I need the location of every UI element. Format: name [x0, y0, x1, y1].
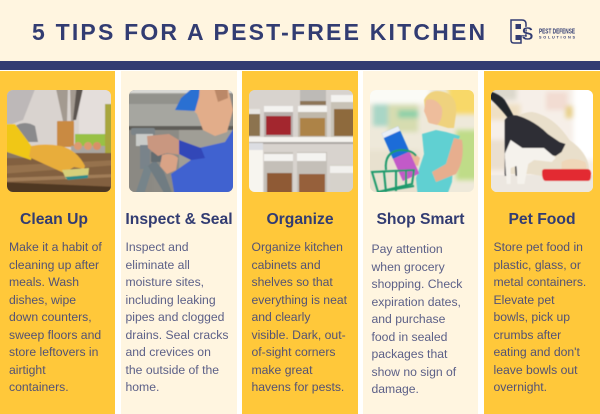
text: Organize tip: and clearly — [252, 310, 310, 324]
heading: Organize: Organize — [266, 211, 334, 228]
text: Inspect & Seal tip — [126, 240, 228, 394]
text: Pet Food tip: eating and don't — [494, 345, 580, 359]
text: Shop Smart tip: expiration dates, — [372, 294, 461, 308]
text: Shop Smart tip: packages that — [372, 347, 447, 361]
text: Organize tip: cabinets and — [252, 258, 321, 272]
text: Clean Up tip: store leftovers in — [9, 345, 98, 359]
heading: Pet Food: Pet Food — [508, 211, 576, 228]
text: Pet Food tip: metal containers. — [494, 275, 586, 289]
text: Pet Food tip: plastic, glass, or — [494, 258, 581, 272]
text: Organize tip: Organize kitchen — [252, 240, 343, 254]
text: Inspect & Seal tip: and crevices on — [126, 345, 211, 359]
text: Pet Food tip: bowls, pick up — [494, 310, 570, 324]
title: 5 TIPS FOR A PEST-FREE KITCHEN — [32, 19, 487, 45]
heading: Clean Up: Clean Up — [20, 211, 88, 228]
text: Pet Food tip: leave bowls out — [494, 362, 578, 376]
text: Inspect & Seal tip: including leaking — [126, 292, 216, 306]
text: Organize tip: shelves so that — [252, 275, 333, 289]
text: Organize tip — [252, 240, 347, 394]
panel: Pet Food — [484, 71, 600, 414]
logo: Pest Defense Solutions: S — [522, 24, 534, 44]
text: Pet Food tip: crumbs after — [494, 328, 561, 342]
logo: Pest Defense Solutions — [510, 19, 575, 44]
text: Clean Up tip: meals. Wash — [9, 275, 79, 289]
heading: Shop Smart: Shop Smart — [376, 211, 465, 228]
text: Shop Smart tip: damage. — [372, 382, 419, 396]
text: Inspect & Seal tip: pipes and clogged — [126, 310, 224, 324]
text: Organize tip: everything is neat — [252, 292, 347, 306]
heading: Inspect & Seal: Inspect & Seal — [125, 211, 233, 228]
panel: Organize — [242, 71, 358, 414]
photo: plumber fixing sink pipes — [129, 90, 233, 192]
text: Shop Smart tip: shopping. Check — [372, 277, 462, 291]
text: Clean Up tip: dishes, wipe — [9, 292, 76, 306]
text: Pet Food tip: Store pet food in — [494, 240, 583, 254]
text: Clean Up tip: sweep floors and — [9, 328, 101, 342]
text: Organize tip: visible. Dark, out- — [252, 328, 346, 342]
navy divider bar — [0, 61, 600, 70]
text: Clean Up tip: containers. — [9, 380, 69, 394]
text: Shop Smart tip: when grocery — [372, 260, 445, 274]
photo: cat and dog eating from red bowl — [491, 90, 593, 192]
photo: organized pantry jars — [249, 90, 353, 192]
text: Pet Food tip: Elevate pet — [494, 292, 554, 306]
text: Shop Smart tip — [372, 242, 462, 396]
panel: Inspect & Seal — [121, 71, 237, 414]
text: Pet Food tip — [494, 240, 586, 394]
panel: Clean Up — [0, 71, 115, 414]
text: Organize tip: make great — [252, 362, 312, 376]
text: Clean Up tip: down counters, — [9, 310, 92, 324]
text: Inspect & Seal tip: the outside of the — [126, 362, 219, 376]
text: Pet Food tip: overnight. — [494, 380, 547, 394]
text: Inspect & Seal tip: eliminate all — [126, 258, 190, 272]
text: Clean Up tip: Make it a habit of — [9, 240, 102, 254]
text: Clean Up tip: airtight — [9, 362, 46, 376]
text: Organize tip: of-sight corners — [252, 345, 336, 359]
text: Shop Smart tip: show no sign of — [372, 364, 456, 378]
text: Inspect & Seal tip: Inspect and — [126, 240, 189, 254]
photo: gloved hand wiping counter — [7, 90, 111, 192]
text: Inspect & Seal tip: moisture sites, — [126, 275, 204, 289]
text: Clean Up tip: cleaning up after — [9, 258, 99, 272]
text: Organize tip: havens for pests. — [252, 380, 344, 394]
text: Inspect & Seal tip: home. — [126, 380, 159, 394]
photo: woman shopping in grocery store — [370, 90, 474, 192]
text: Inspect & Seal tip: drains. Seal cracks — [126, 328, 228, 342]
text: Shop Smart tip: and purchase — [372, 312, 445, 326]
text: Shop Smart tip: food in sealed — [372, 330, 447, 344]
panel: Shop Smart — [363, 71, 478, 414]
text: Shop Smart tip: Pay attention — [372, 242, 443, 256]
text: Clean Up tip — [9, 240, 102, 394]
header band — [0, 0, 600, 61]
logo: Pest Defense Solutions: SOLUTIONS — [539, 36, 575, 40]
